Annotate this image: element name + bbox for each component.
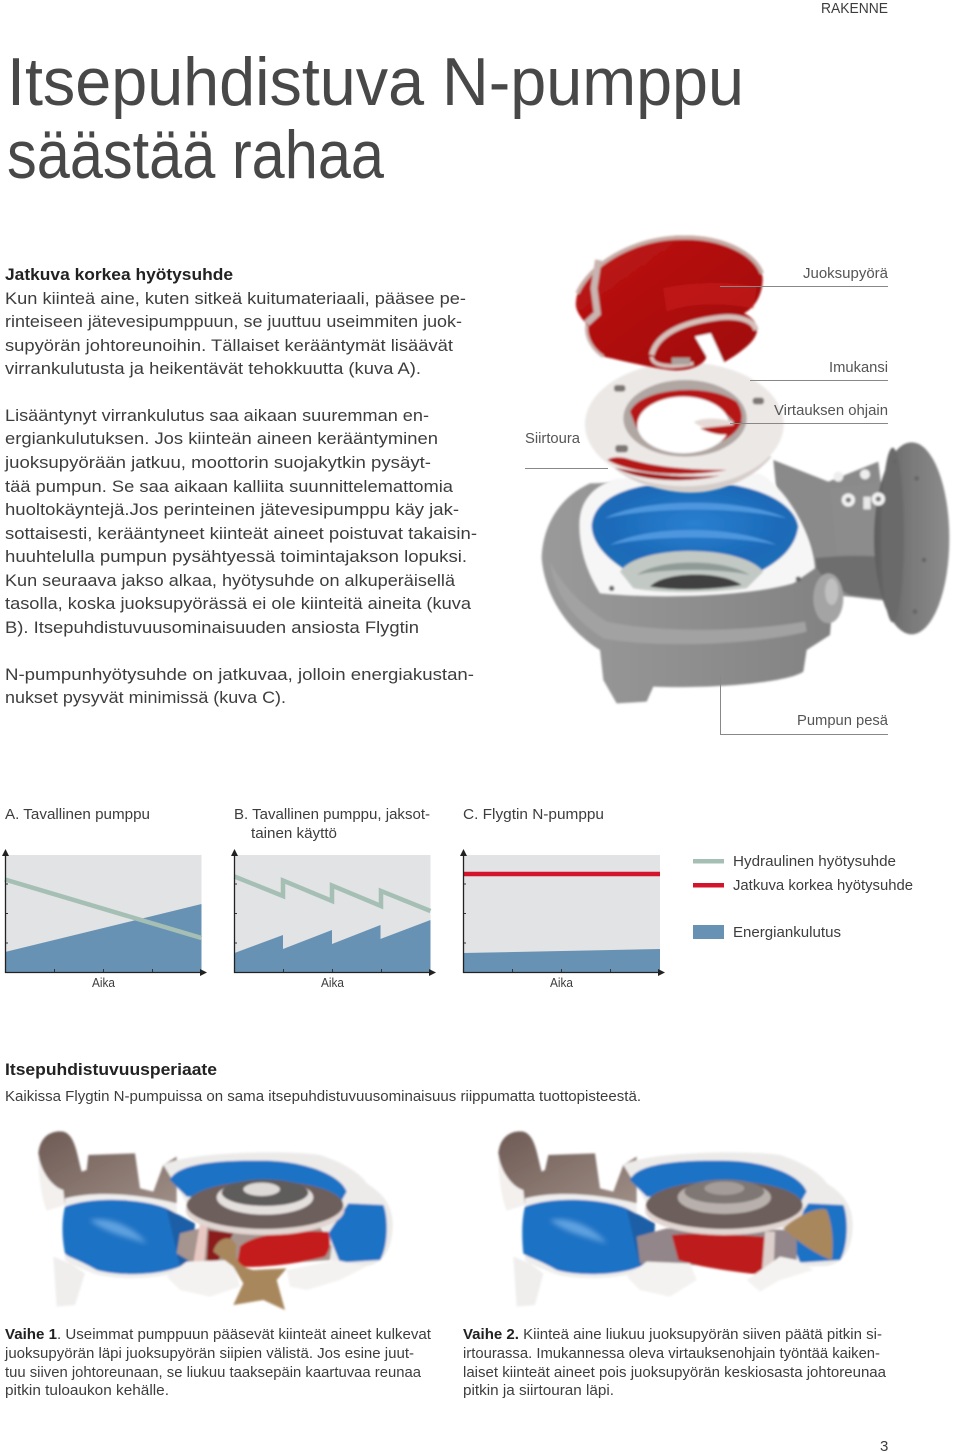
text block: energy consumption paragraph: tää pumpun. Se saa aikaan kalliita suunnittelemattomia: [5, 477, 454, 496]
text block: Vaihe 1: tuu siiven johtoreunaan, se liukuu taaksepäin kaartuvaa reunaa: [5, 1364, 422, 1381]
chart B: jaksottainen käyttö: [231, 849, 436, 990]
text block: Jatkuva korkea hyötysuhde: virrankulutusta ja heikentävät tehokkuutta (kuva A).: [5, 359, 421, 378]
section label: Rakenne: RAKENNE: [821, 1, 888, 17]
chart heading B: B. Tavallinen pumppu, jaksot-: [234, 806, 430, 823]
text block: Vaihe 1: juoksupyörän läpi juoksupyörän siipien välistä. Jos esine juut-: [4, 1345, 414, 1362]
text block: energy consumption paragraph: [4, 406, 477, 637]
callout: Virtauksen ohjain: Virtauksen ohjain: [774, 403, 888, 419]
legend: Hydraulinen hyötysuhde: [733, 853, 896, 870]
title: Itsepuhdistuva N-pumppu: [7, 44, 744, 120]
text block: Vaihe 2: Vaihe 2. Kiinteä aine liukuu juoksupyörän siiven päätä pitkin si-: [463, 1326, 882, 1343]
text block: Vaihe 2: pitkin ja siirtouran läpi.: [463, 1382, 614, 1399]
heading: Itsepuhdistuvuusperiaate: Itsepuhdistuvuusperiaate: [5, 1060, 217, 1079]
suction cover: [585, 362, 784, 493]
text block: Vaihe 2: [463, 1326, 887, 1399]
text block: energy consumption paragraph: sottaisesti, kerääntyneet kiinteät aineet poistuvat takaisin-: [5, 524, 477, 543]
illustration: exploded pump: [542, 236, 949, 703]
chart C: Flygtin N-pumppu: Aika: [550, 976, 573, 990]
title: [7, 44, 744, 193]
text block: Jatkuva korkea hyötysuhde: Kun kiinteä aine, kuten sitkeä kuitumateriaali, pääsee pe-: [5, 289, 466, 308]
chart heading A: A. Tavallinen pumppu: [5, 806, 150, 823]
text block: Jatkuva korkea hyötysuhde: rinteiseen jätevesipumppuun, se juuttuu useimmiten juok-: [5, 312, 462, 331]
callout: Pumpun pesä: [720, 676, 889, 734]
chart A: Tavallinen pumppu: Aika: [92, 976, 115, 990]
legend: [693, 853, 913, 941]
text block: Vaihe 1: Vaihe 1. Useimmat pumppuun pääsevät kiinteät aineet kulkevat: [5, 1326, 432, 1343]
text block: energy consumption paragraph: juoksupyörään jatkuu, moottorin suojakytkin pysäyt-: [4, 453, 431, 472]
chart B: jaksottainen käyttö: Aika: [321, 976, 344, 990]
chart heading B: [234, 806, 430, 842]
pump housing: [542, 442, 949, 703]
chart heading C: C. Flygtin N-pumppu: [463, 806, 604, 823]
callout: Juoksupyörä: Juoksupyörä: [803, 266, 889, 282]
text block: energy consumption paragraph: huuhtelulla pumpun pysähtyessä toimintajakson lopuksi.: [5, 547, 467, 566]
chart C: Flygtin N-pumppu: [460, 849, 665, 990]
white flange rim and blue volute: [579, 473, 815, 596]
text block: Vaihe 2: irtourassa. Imukannessa oleva virtauksenohjain työntää kaiken-: [463, 1345, 880, 1362]
text block: Vaihe 1: [4, 1326, 432, 1399]
text block: Vaihe 2: laiset kiinteät aineet pois juoksupyörän keskiosasta johtoreunaa: [463, 1364, 887, 1381]
text block: energy consumption paragraph: Lisääntynyt virrankulutus saa aikaan suuremman en-: [5, 406, 429, 425]
legend: Jatkuva korkea hyötysuhde: [733, 877, 913, 894]
text block: energy consumption paragraph: huoltokäyntejä.Jos perinteinen jätevesipumppu käy jak-: [5, 500, 459, 519]
callout: Imukansi: Imukansi: [829, 360, 888, 376]
text block: N-pump efficiency: nukset pysyvät minimissä (kuva C).: [5, 688, 286, 707]
illustration: phase 2 cutaway: [498, 1131, 853, 1307]
text block: Jatkuva korkea hyötysuhde: [5, 265, 466, 378]
text block: N-pump efficiency: N-pumpunhyötysuhde on jatkuvaa, jolloin energiakustan-: [5, 665, 474, 684]
callout: Imukansi: [750, 360, 888, 380]
text block: energy consumption paragraph: ergiankulutuksen. Jos kiinteän aineen kerääntyminen: [5, 429, 438, 448]
callout: Pumpun pesä: Pumpun pesä: [797, 713, 889, 729]
callout: Siirtoura: [525, 431, 608, 468]
title: säästää rahaa: [7, 117, 384, 193]
text block: energy consumption paragraph: B). Itsepuhdistuvuusominaisuuden ansiosta Flygtin: [5, 618, 419, 637]
text block: Vaihe 1: pitkin tuloaukon kehälle.: [5, 1382, 169, 1399]
legend: Energiankulutus: [733, 924, 841, 941]
chart heading B: tainen käyttö: [251, 825, 337, 842]
text block: energy consumption paragraph: tasolla, koska juoksupyörässä ei ole kiinteitä aineita (kuva: [5, 594, 472, 613]
illustration: phase 1 cutaway: [38, 1131, 393, 1310]
text block: N-pump efficiency: [5, 665, 474, 707]
text block: Jatkuva korkea hyötysuhde: Jatkuva korkea hyötysuhde: [5, 265, 233, 284]
impeller: [576, 236, 763, 370]
chart A: Tavallinen pumppu: [2, 849, 207, 990]
text block: energy consumption paragraph: Kun seuraava jakso alkaa, hyötysuhde on alkuperäisellä: [5, 571, 456, 590]
callout: Siirtoura: Siirtoura: [525, 431, 581, 447]
text block: Jatkuva korkea hyötysuhde: supyörän johtoreunoihin. Tällaiset kerääntymät lisäävät: [5, 336, 453, 355]
intro text: Kaikissa Flygtin N-pumpuissa on sama itsepuhdistuvuusominaisuus riippumatta tuottopisteestä.: [5, 1088, 641, 1105]
